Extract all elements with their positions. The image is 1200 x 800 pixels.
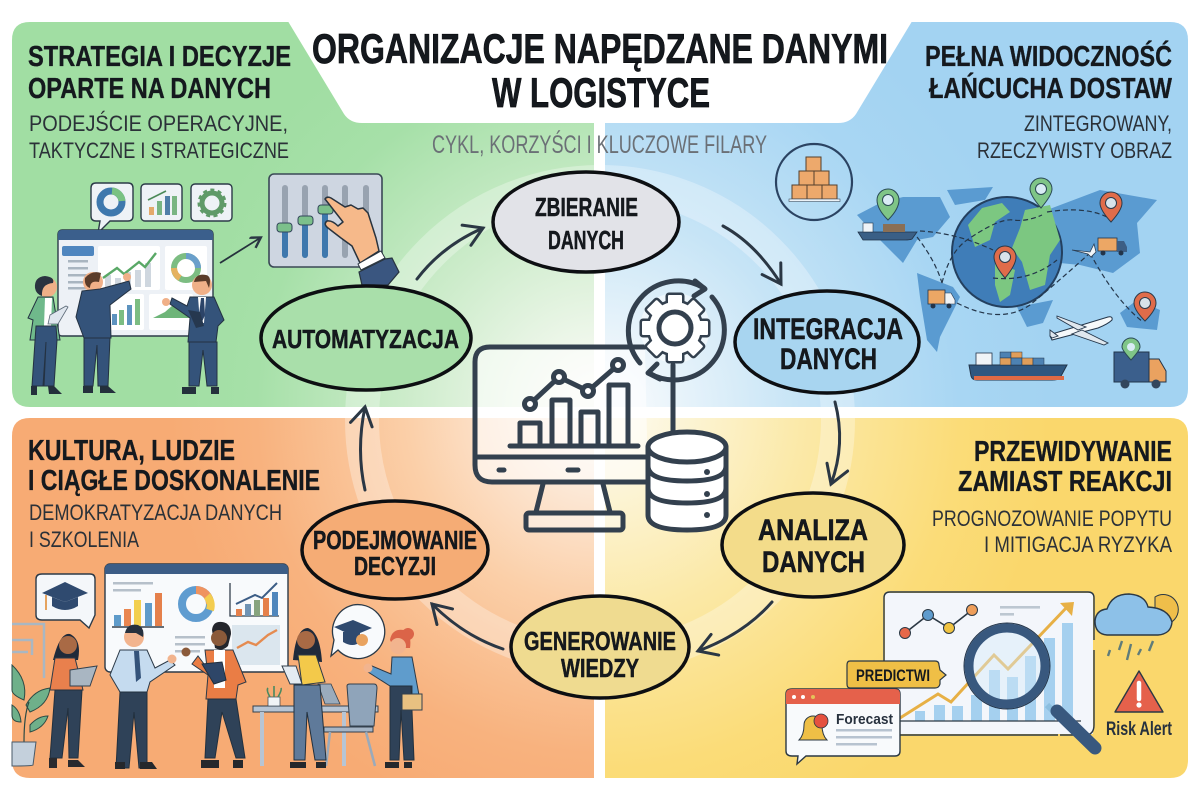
cycle ring (362, 182, 838, 658)
text: culture description: DEMOKRATYZACJA DANYCH (29, 500, 282, 525)
icon: small ship (858, 223, 917, 240)
title (312, 25, 888, 116)
pin: green top (1030, 178, 1052, 208)
cycle node: knowledge generation: WIEDZY (561, 653, 639, 683)
text: prediction description (932, 506, 1172, 557)
pin: globe center (994, 246, 1016, 278)
cycle node: automation (261, 286, 471, 390)
person: man with folder (162, 275, 224, 394)
pin: orange australia (1134, 292, 1156, 321)
person: woman with tablet (28, 276, 68, 395)
heading: strategy: STRATEGIA I DECYZJE (28, 41, 291, 73)
title: ORGANIZACJE NAPĘDZANE DANYMI (312, 25, 888, 72)
heading: strategy (28, 41, 291, 105)
cycle arrow: knowledge to decisions (432, 604, 503, 649)
heading: culture: I CIĄGŁE DOSKONALENIE (28, 465, 320, 497)
cycle node: data collection: ZBIERANIE (535, 192, 638, 222)
cycle arrow: decisions to automation (360, 407, 365, 490)
person: man pointing (76, 272, 131, 393)
cycle node: decision making: PODEJMOWANIE (313, 525, 477, 555)
icon: graduation cap bubble (36, 574, 95, 628)
icon: container ship (969, 352, 1067, 380)
cycle node: knowledge generation: GENEROWANIE (524, 626, 676, 656)
cycle node: automation: AUTOMATYZACJA (272, 324, 459, 354)
pin: orange right (1100, 192, 1122, 222)
icon: small plane (1072, 244, 1096, 257)
illustration: culture team (12, 564, 422, 769)
cycle arrow: collection to integration (723, 226, 781, 284)
cycle node: data analysis: ANALIZA (758, 514, 868, 547)
text: strategy description: PODEJŚCIE OPERACYJNE, (29, 111, 288, 136)
heading: strategy: OPARTE NA DANYCH (28, 73, 271, 105)
bar and line chart (510, 360, 638, 446)
cycle node: data integration: DANYCH (780, 343, 877, 376)
gear with cycle arrows (628, 281, 724, 432)
cycle arrow: analysis to knowledge (698, 602, 772, 651)
person: woman with red hair (364, 628, 422, 768)
cycle node: knowledge generation (511, 596, 689, 698)
icon: truck on asia (1098, 238, 1127, 256)
panel: culture background (12, 418, 594, 778)
text: culture description (29, 500, 282, 552)
label: predictive tag (847, 661, 946, 688)
text: prediction description: I MITIGACJA RYZYKA (984, 532, 1172, 557)
icon: donut bubble (91, 183, 133, 233)
cycle node: data integration (735, 291, 919, 393)
icon: large plane (1050, 316, 1112, 345)
heading: culture (28, 435, 320, 497)
panel: prediction background (605, 418, 1188, 778)
illustration: predictive analytics (786, 592, 1178, 764)
title banner (286, 18, 914, 123)
icon: risk alert triangle (1115, 671, 1163, 712)
icon: truck on south america (928, 290, 955, 308)
illustration: strategy team and dashboard (28, 174, 399, 395)
icon: gear tile (191, 184, 232, 221)
cycle node: data integration: INTEGRACJA (753, 313, 903, 346)
shelf (12, 624, 44, 678)
world map (857, 187, 1160, 352)
forecast alert window: Forecast (836, 711, 893, 728)
text: visibility description (977, 111, 1172, 163)
database cylinder (648, 432, 726, 530)
cycle arrow: automation to collection (417, 228, 483, 279)
label: risk alert: Risk Alert (1106, 719, 1173, 740)
desk with laptop and chair (253, 684, 378, 766)
heading: culture: KULTURA, LUDZIE (28, 435, 235, 467)
label: predictive tag: PREDICTWI (856, 666, 930, 685)
globe (952, 197, 1062, 307)
cycle arrow: integration to analysis (831, 402, 840, 484)
heading: prediction (958, 436, 1172, 498)
forecast alert window (786, 689, 900, 764)
icon: slider control panel (269, 174, 382, 267)
icon: bar chart tile (141, 184, 182, 221)
dashboard window (58, 230, 213, 336)
panel: strategy background (12, 22, 594, 407)
cycle node: decision making (302, 501, 488, 599)
monitor (475, 347, 648, 530)
cycle node: data collection: DANYCH (548, 225, 624, 255)
title: W LOGISTYCE (492, 69, 710, 116)
icon: cloud and sun (1095, 594, 1178, 660)
forecast chart board (884, 592, 1094, 735)
icon: boxes in circle (776, 144, 852, 220)
cycle node: data analysis (722, 493, 904, 597)
person: woman with tablet (49, 634, 97, 768)
arrow: dashboard to sliders (220, 238, 260, 263)
text: culture description: I SZKOLENIA (29, 527, 139, 552)
icon: round speech bubble with cap (331, 605, 385, 659)
person: woman in yellow (282, 628, 326, 768)
icon: magnifying glass (964, 623, 1095, 748)
dashboard board (105, 564, 288, 672)
person: man in blue shirt (110, 625, 176, 769)
central icon: monitor with data and gear (475, 281, 726, 530)
subtitle: CYKL, KORZYŚCI I KLUCZOWE FILARY (432, 129, 767, 159)
illustration: global supply chain (776, 144, 1166, 388)
icon: adjusting hand (325, 197, 399, 285)
icon: delivery truck with pin (1114, 338, 1166, 388)
text: strategy description: TAKTYCZNE I STRATEGICZNE (29, 138, 289, 163)
cycle node: decision making: DECYZJI (354, 551, 436, 581)
person: man in orange jacket (182, 622, 246, 768)
route lines (917, 210, 1143, 322)
text: strategy description (29, 111, 289, 163)
plant (12, 665, 50, 766)
cycle node: data analysis: DANYCH (762, 546, 865, 579)
panel: visibility background (605, 22, 1188, 407)
heading: visibility (925, 39, 1173, 105)
cycle node: data collection (493, 172, 679, 272)
pin: green left (877, 189, 899, 220)
